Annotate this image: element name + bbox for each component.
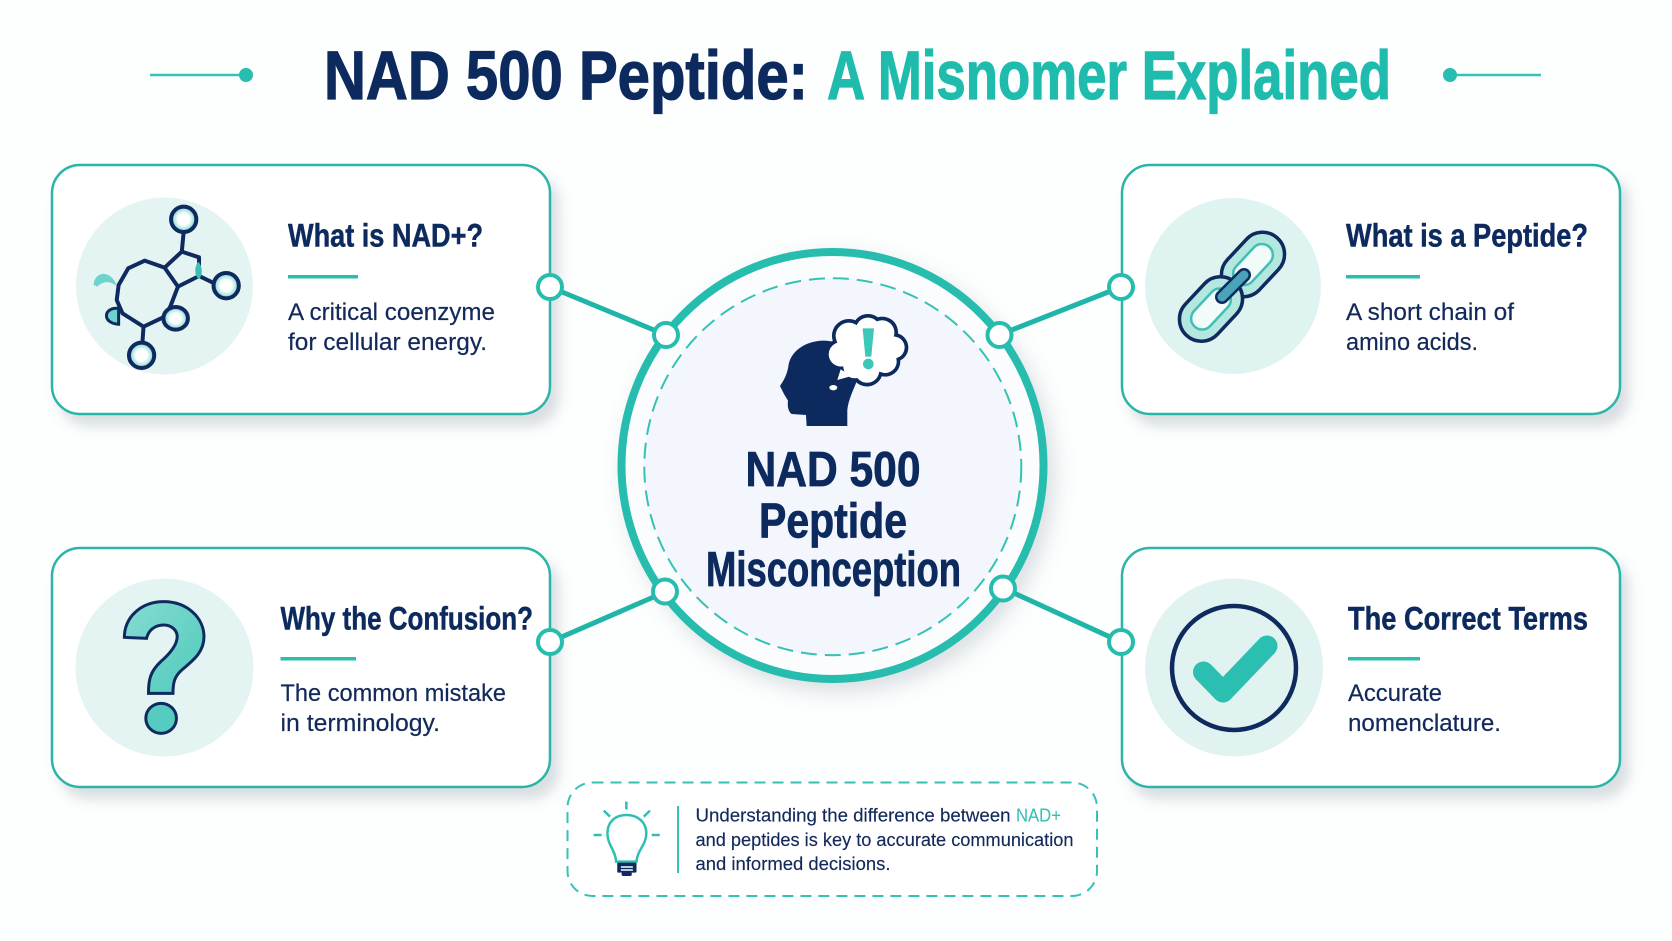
- icon: question mark: [76, 578, 254, 756]
- body text: in terminology.: [280, 710, 440, 737]
- body text: nomenclature.: [1348, 710, 1501, 737]
- central label: [706, 443, 961, 597]
- title: dark text: NAD 500 Peptide:: [324, 37, 808, 114]
- panel: Why the Confusion: [52, 548, 550, 787]
- accent rule: [1346, 275, 1420, 278]
- panel: What is NAD+: [52, 165, 550, 414]
- card frame: [52, 165, 550, 414]
- body text: [1348, 680, 1501, 737]
- body text: [288, 299, 495, 356]
- connector: bottom right: [1003, 588, 1121, 642]
- connector: top left: [550, 287, 666, 335]
- body text: [1346, 299, 1514, 356]
- body text: amino acids.: [1346, 329, 1478, 356]
- icon: molecule: [76, 198, 253, 374]
- title: right ornament: [1443, 68, 1541, 82]
- connector: top right: [999, 287, 1121, 335]
- callout text: and peptides is key to accurate communication: [696, 829, 1074, 850]
- connector: bottom left: [550, 592, 665, 642]
- body text: A short chain of: [1346, 299, 1514, 326]
- callout text: [696, 804, 1074, 874]
- icon: head with thought bubble: [780, 316, 906, 426]
- body text: A critical coenzyme: [288, 299, 495, 326]
- accent rule: [288, 275, 358, 278]
- title: left ornament: [150, 68, 253, 82]
- central label: Peptide: [759, 494, 907, 548]
- heading: Why the Confusion?: [280, 600, 533, 636]
- body text: The common mistake: [280, 680, 506, 707]
- heading: The Correct Terms: [1348, 600, 1588, 636]
- central label: Misconception: [706, 543, 961, 597]
- connector nodes: [538, 275, 1133, 654]
- callout text: Understanding the difference between: [696, 804, 1010, 826]
- divider: [677, 806, 679, 873]
- accent rule: [1348, 657, 1420, 660]
- callout text: NAD+: [1016, 804, 1061, 826]
- central label: NAD 500: [746, 443, 920, 497]
- callout frame: [568, 782, 1097, 896]
- body text: for cellular energy.: [288, 329, 487, 356]
- icon: check mark: [1145, 578, 1323, 756]
- accent rule: [280, 657, 356, 660]
- inner disc: [644, 278, 1021, 655]
- panel: central circle: [622, 252, 1044, 679]
- body text: [280, 680, 506, 737]
- heading: What is a Peptide?: [1346, 218, 1588, 254]
- icon: chain link: [1145, 198, 1321, 374]
- callout text: and informed decisions.: [696, 853, 890, 874]
- card frame: [1122, 548, 1620, 787]
- callout: key takeaway: [568, 782, 1097, 896]
- card frame: [1122, 165, 1620, 414]
- icon: light bulb: [594, 802, 660, 876]
- body text: Accurate: [1348, 680, 1442, 707]
- card frame: [52, 548, 550, 787]
- panel: What is a Peptide: [1122, 165, 1620, 414]
- title: teal text: A Misnomer Explained: [827, 37, 1391, 114]
- title: [150, 37, 1541, 114]
- panel: The Correct Terms: [1122, 548, 1620, 787]
- outer ring: [622, 252, 1044, 679]
- heading: What is NAD+?: [288, 218, 483, 254]
